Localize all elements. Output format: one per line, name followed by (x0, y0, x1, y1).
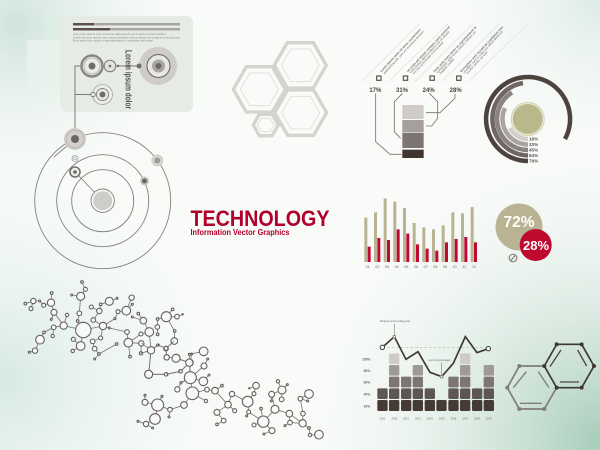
red bars (368, 229, 477, 262)
block row 1 (377, 400, 494, 411)
month labels: 10 (453, 265, 457, 269)
chart: overlapping percent circles: 72% (503, 214, 535, 231)
stacked segments (402, 105, 424, 158)
ring labels (529, 136, 538, 164)
y axis labels: 80% (364, 369, 370, 373)
diagonal text blocks: Duis aute irure dolor in reprehenderit in (432, 25, 478, 73)
ring centre (511, 102, 544, 136)
diagonal text blocks: Excepteur sint occaecat cupidatat non (459, 25, 504, 73)
month labels: 08 (433, 265, 437, 269)
panel: circuit card: Lorem ipsum dolor (124, 50, 134, 109)
month labels: 04 (395, 265, 399, 269)
year labels: 2010 (379, 416, 386, 420)
diagonal text blocks: exercitation ullamco laboris nisi ut aliquip (409, 30, 451, 74)
percentages: 28% (450, 88, 462, 94)
y axis labels: 60% (364, 381, 370, 385)
icon: circuit node 3 (136, 47, 177, 85)
year labels: 2012 (403, 416, 409, 420)
circuit connectors (75, 66, 158, 140)
chart: stacked percent bar (362, 23, 528, 158)
diagonal text blocks: ex ea commodo consequat (412, 40, 444, 75)
orbit small node (72, 156, 78, 162)
diagonal text blocks: mollit anim id est (465, 50, 489, 75)
month labels: 07 (424, 265, 428, 269)
month labels: 06 (414, 265, 418, 269)
chart: molecule network upper (24, 281, 195, 384)
year labels: 2014 (427, 416, 433, 420)
chart: block columns with line (362, 319, 494, 420)
diagonal text blocks: proident, sunt in culpa qui officia deserunt (462, 30, 504, 74)
percentages: 24% (423, 88, 435, 94)
title: TECHNOLOGY (190, 206, 330, 231)
diagonal text blocks: adipisicing elit, sed do eiusmod tempor (382, 30, 425, 75)
annotation: Request point cycling peak (380, 319, 410, 323)
year labels: 2019 (486, 416, 492, 420)
icon: double hexagon molecule (505, 342, 596, 411)
orbit node right (140, 176, 149, 186)
y axis labels (362, 357, 371, 408)
leader lines (376, 93, 455, 154)
panel: circuit card: Lorem ipsum dolor sit amet, consectetur adipisicing elit, sed do eiusmod tempor incididunt (73, 32, 166, 36)
y axis labels: 20% (364, 404, 370, 408)
month labels: 02 (375, 265, 379, 269)
diagonal text blocks: Lorem Ipsum dolor sit amet, consectetur (379, 27, 422, 73)
orbit diagram (35, 128, 171, 269)
panel: circuit card: Duis aute irure dolor in reprehenderit in voluptate velit esse (73, 38, 154, 42)
panel: circuit card: Ut enim ad minim veniam, quis nostrud exercitation ullamco laboris nisi ut aliquip ex ea commodo (73, 36, 181, 40)
percentages (369, 88, 462, 94)
percentages: 31% (396, 88, 409, 94)
ring labels: 33% (529, 142, 538, 147)
block row 2 (377, 388, 494, 399)
month labels: 12 (472, 265, 476, 269)
ring labels: 64% (529, 153, 538, 158)
orbit node inner (70, 167, 80, 177)
block row 4 (389, 365, 494, 376)
chart: overlapping percent circles (496, 204, 552, 261)
icon: circuit node 4 (91, 84, 112, 104)
chart: overlapping percent circles: 28% (523, 238, 549, 253)
chart: monthly paired bars (364, 198, 477, 269)
year labels: 2015 (439, 416, 445, 420)
month labels: 05 (404, 265, 408, 269)
orbit node outer (151, 154, 163, 166)
orbit hub node (64, 128, 86, 150)
year labels: 2011 (391, 416, 398, 420)
month labels: 03 (385, 265, 389, 269)
y axis labels: 100% (362, 357, 371, 361)
ring labels: 45% (529, 148, 538, 152)
hexagon atoms (505, 342, 596, 411)
icon: circuit node 2 (104, 60, 119, 72)
line series (382, 337, 488, 377)
diagonal text blocks (379, 25, 504, 75)
ring labels: 79% (529, 158, 538, 164)
month labels: 11 (462, 265, 466, 269)
month labels (366, 265, 476, 269)
icon: circuit node 1 (82, 56, 102, 76)
annotation: Lost of percentages (428, 358, 451, 362)
block row 3 (389, 377, 494, 387)
subtitle: Information Vector Graphics (190, 228, 290, 237)
line markers (380, 335, 490, 378)
chart: molecule network lower (137, 341, 323, 439)
olive bars (364, 198, 474, 262)
diagonal text blocks: fugiat nulla (438, 57, 455, 75)
chart: radial progress rings (486, 77, 570, 164)
diagonal text blocks: voluptate velit esse cillum dolore eu (435, 30, 477, 74)
month labels: 01 (366, 265, 370, 269)
checkboxes (377, 76, 461, 80)
year labels: 2016 (450, 416, 457, 420)
year labels (379, 416, 492, 420)
icon: no symbol (509, 254, 517, 262)
icon: hexagon cluster (233, 43, 327, 136)
y axis labels: 40% (364, 393, 370, 397)
year labels: 2017 (462, 416, 469, 420)
year labels: 2018 (474, 416, 480, 420)
percentages: 17% (369, 88, 382, 94)
block row 5 (389, 353, 470, 364)
ring labels: 18% (529, 136, 538, 142)
year labels: 2013 (415, 416, 421, 420)
diagonal text blocks: Ut enim ad minim veniam, quis nostrud (406, 25, 451, 73)
panel: circuit card (27, 16, 193, 112)
month labels: 09 (443, 265, 447, 269)
